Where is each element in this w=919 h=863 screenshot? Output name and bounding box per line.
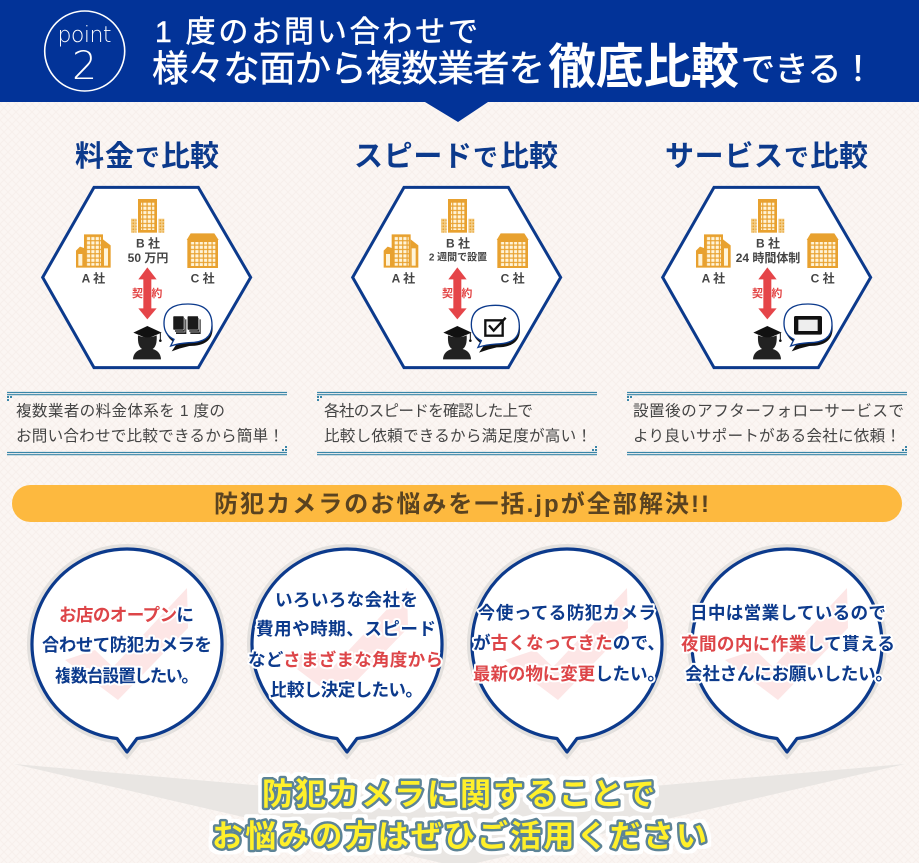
diagram: speed	[353, 187, 561, 368]
header title	[152, 16, 875, 94]
bubble 4	[681, 544, 895, 760]
call to action	[212, 777, 707, 854]
diagram: service: C 社	[811, 271, 835, 286]
text box: service: 設置後のアフターフォローサービスで	[633, 402, 904, 420]
text box: service	[627, 392, 907, 455]
heading: speed: 比較	[500, 140, 558, 173]
bubble 1: お店のオープンに	[59, 605, 194, 625]
panel: service comparison	[627, 140, 907, 455]
section banner	[12, 485, 902, 522]
text box: speed: 各社のスピードを確認した上で	[324, 402, 533, 420]
badge: point 2	[45, 11, 125, 91]
diagram: price: B 社	[136, 236, 160, 251]
heading: service: サービス	[665, 140, 783, 173]
text box: service: より良いサポートがある会社に依頼！	[633, 427, 901, 445]
diagram: price: C 社	[191, 271, 215, 286]
diagram: price: 契	[132, 286, 143, 300]
icon: speech bubble with checkbox	[471, 305, 520, 353]
bubble 2	[247, 544, 447, 760]
diagram: service: 24 時間体制	[736, 250, 800, 265]
bubble 1: 合わせて防犯カメラを	[42, 635, 212, 655]
diagram: service: B 社	[756, 236, 780, 251]
text box: price: お問い合わせで比較できるから簡単！	[16, 427, 284, 445]
badge: point 2: 2	[72, 44, 97, 89]
bubble 2: 費用や時期、スピード	[256, 619, 436, 639]
diagram: price	[43, 187, 251, 368]
text box: speed: 比較し依頼できるから満足度が高い！	[324, 427, 592, 445]
bubble 1: 複数台設置したい。	[55, 666, 199, 686]
heading: speed: で	[473, 144, 498, 172]
heading: speed	[354, 140, 558, 173]
text box: speed	[317, 392, 597, 455]
bubble 2: などさまざまな角度から	[248, 650, 443, 670]
text box: price: 複数業者の料金体系を 1 度の	[16, 402, 225, 420]
heading: price: 比較	[161, 140, 219, 173]
diagram: speed: A 社	[392, 271, 415, 286]
diagram: service	[663, 187, 871, 368]
bubble 3: が古くなってきたので、	[473, 633, 665, 653]
bubble 3	[467, 544, 667, 760]
header title: できる！	[741, 51, 875, 89]
diagram: speed: 約	[461, 286, 472, 300]
diagram: price: 約	[151, 286, 162, 300]
text box: price	[7, 392, 287, 455]
call to action: 防犯カメラに関することで	[262, 777, 655, 812]
heading: service	[665, 140, 868, 173]
diagram: service: 契	[752, 286, 763, 300]
bubble 4: 日中は営業しているので	[690, 603, 886, 623]
diagram: speed: 2 週間で設置	[429, 250, 487, 263]
header banner	[0, 0, 919, 122]
heading: price	[75, 140, 219, 173]
bubble 3: 最新の物に変更したい。	[473, 664, 665, 684]
section banner: 防犯カメラのお悩みを一括.jpが全部解決!!	[214, 490, 709, 518]
heading: price: で	[135, 144, 160, 172]
heading: service: で	[784, 144, 809, 172]
down arrow	[14, 764, 905, 863]
header title: 徹底比較	[548, 41, 739, 94]
diagram: service: A 社	[702, 271, 725, 286]
panel: price comparison	[7, 140, 287, 455]
diagram: speed: C 社	[501, 271, 525, 286]
diagram: speed: B 社	[446, 236, 470, 251]
header title: 様々な面から複数業者を	[152, 48, 545, 89]
bubble 1	[27, 544, 227, 760]
diagram: service: 約	[771, 286, 782, 300]
panel: speed comparison	[317, 140, 597, 455]
diagram: price: 50 万円	[128, 251, 168, 265]
icon: speech bubble with tablet	[784, 304, 833, 351]
bubble 3: 今使ってる防犯カメラ	[478, 603, 656, 623]
icon: speech bubble with books	[164, 304, 213, 351]
heading: speed: スピード	[354, 141, 472, 173]
heading: price: 料金	[75, 140, 134, 173]
badge: point 2: point	[58, 23, 112, 48]
bubble 4: 夜間の内に作業して貰える	[681, 634, 895, 654]
bubble 2: 比較し決定したい。	[270, 680, 423, 700]
heading: service: 比較	[810, 140, 868, 173]
diagram: price: A 社	[82, 271, 105, 286]
diagram: speed: 契	[442, 286, 453, 300]
bubble 2: いろいろな会社を	[275, 590, 418, 610]
bubble 4: 会社さんにお願いしたい。	[685, 664, 893, 684]
header title: 1 度のお問い合わせで	[155, 16, 478, 49]
call to action: お悩みの方はぜひご活用ください	[212, 819, 707, 854]
